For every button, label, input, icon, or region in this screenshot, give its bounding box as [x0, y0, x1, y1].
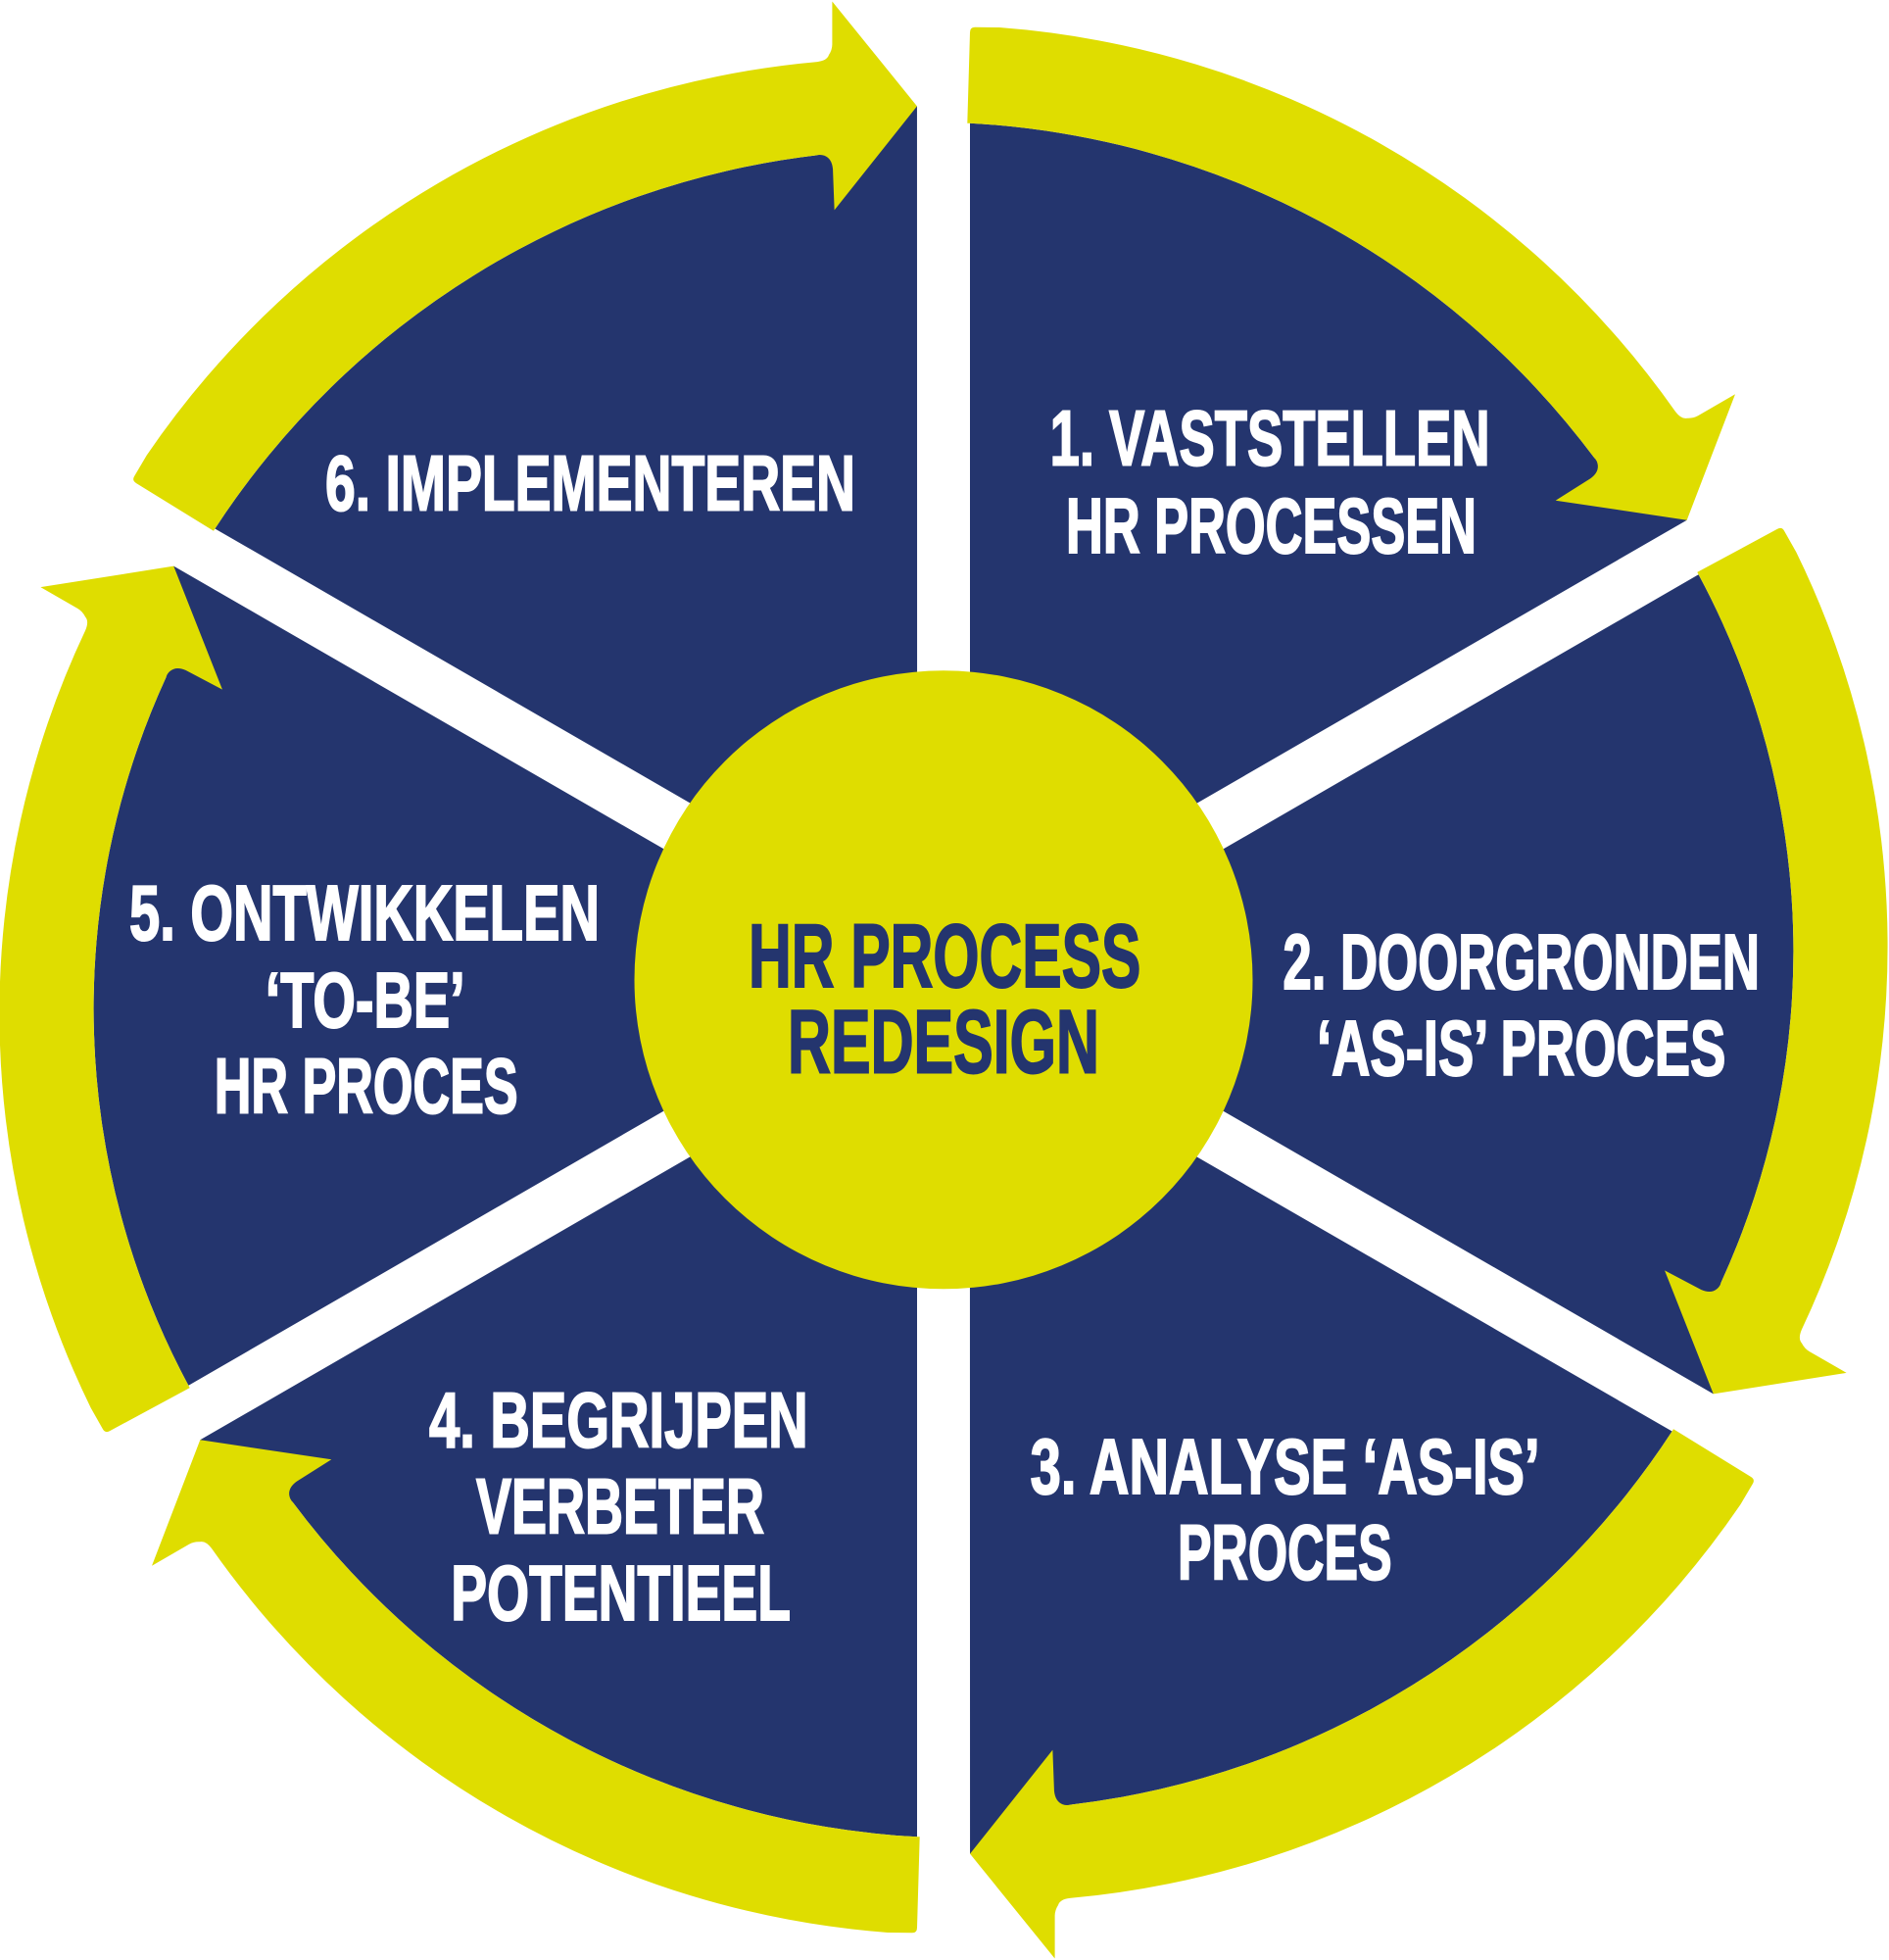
label: step 4: VERBETER: [476, 1463, 764, 1550]
arrow: step 4: [152, 1440, 920, 1933]
sector: step 5: [94, 566, 891, 1386]
arrow: step 1: [967, 27, 1735, 520]
label: step 1: [1050, 394, 1490, 569]
sector: step 3: [970, 1026, 1672, 1854]
panel: step 2: [996, 528, 1888, 1394]
arrow: step 2: [1665, 528, 1888, 1394]
label: step 3: 3. ANALYSE ‘AS-IS’: [1031, 1423, 1540, 1510]
label: step 4: 4. BEGRIJPEN: [429, 1377, 808, 1464]
label: step 3: [1031, 1423, 1540, 1596]
label: step 5: HR PROCES: [215, 1043, 518, 1130]
panel: step 6: [133, 1, 917, 934]
arrow: step 6: [133, 1, 917, 531]
title: HR PROCESS: [749, 906, 1140, 1006]
arrow: step 5: [0, 566, 222, 1432]
label: step 3: PROCES: [1178, 1509, 1392, 1596]
label: step 4: [429, 1377, 808, 1637]
label: step 5: ‘TO-BE’: [266, 956, 465, 1044]
label: step 6: 6. IMPLEMENTEREN: [325, 440, 855, 527]
label: step 4: POTENTIEEL: [451, 1549, 791, 1637]
panel: step 3: [970, 1026, 1754, 1959]
sector: step 1: [970, 123, 1687, 934]
title: REDESIGN: [788, 992, 1099, 1092]
panel: centre hub: [635, 670, 1252, 1289]
sector: step 2: [996, 574, 1793, 1394]
sector: step 6: [215, 106, 917, 934]
label: step 5: 5. ONTWIKKELEN: [129, 869, 600, 956]
panel: step 4: [152, 1026, 920, 1933]
hub circle: [635, 670, 1252, 1289]
title: [749, 906, 1140, 1092]
sector: step 4: [200, 1026, 917, 1837]
label: step 1: HR PROCESSEN: [1066, 482, 1477, 569]
panel: step 1: [967, 27, 1735, 934]
label: step 5: [129, 869, 600, 1130]
label: step 1: 1. VASTSTELLEN: [1050, 394, 1490, 482]
arrow: step 3: [970, 1429, 1754, 1959]
label: step 2: [1283, 918, 1760, 1092]
panel: step 5: [0, 566, 891, 1432]
